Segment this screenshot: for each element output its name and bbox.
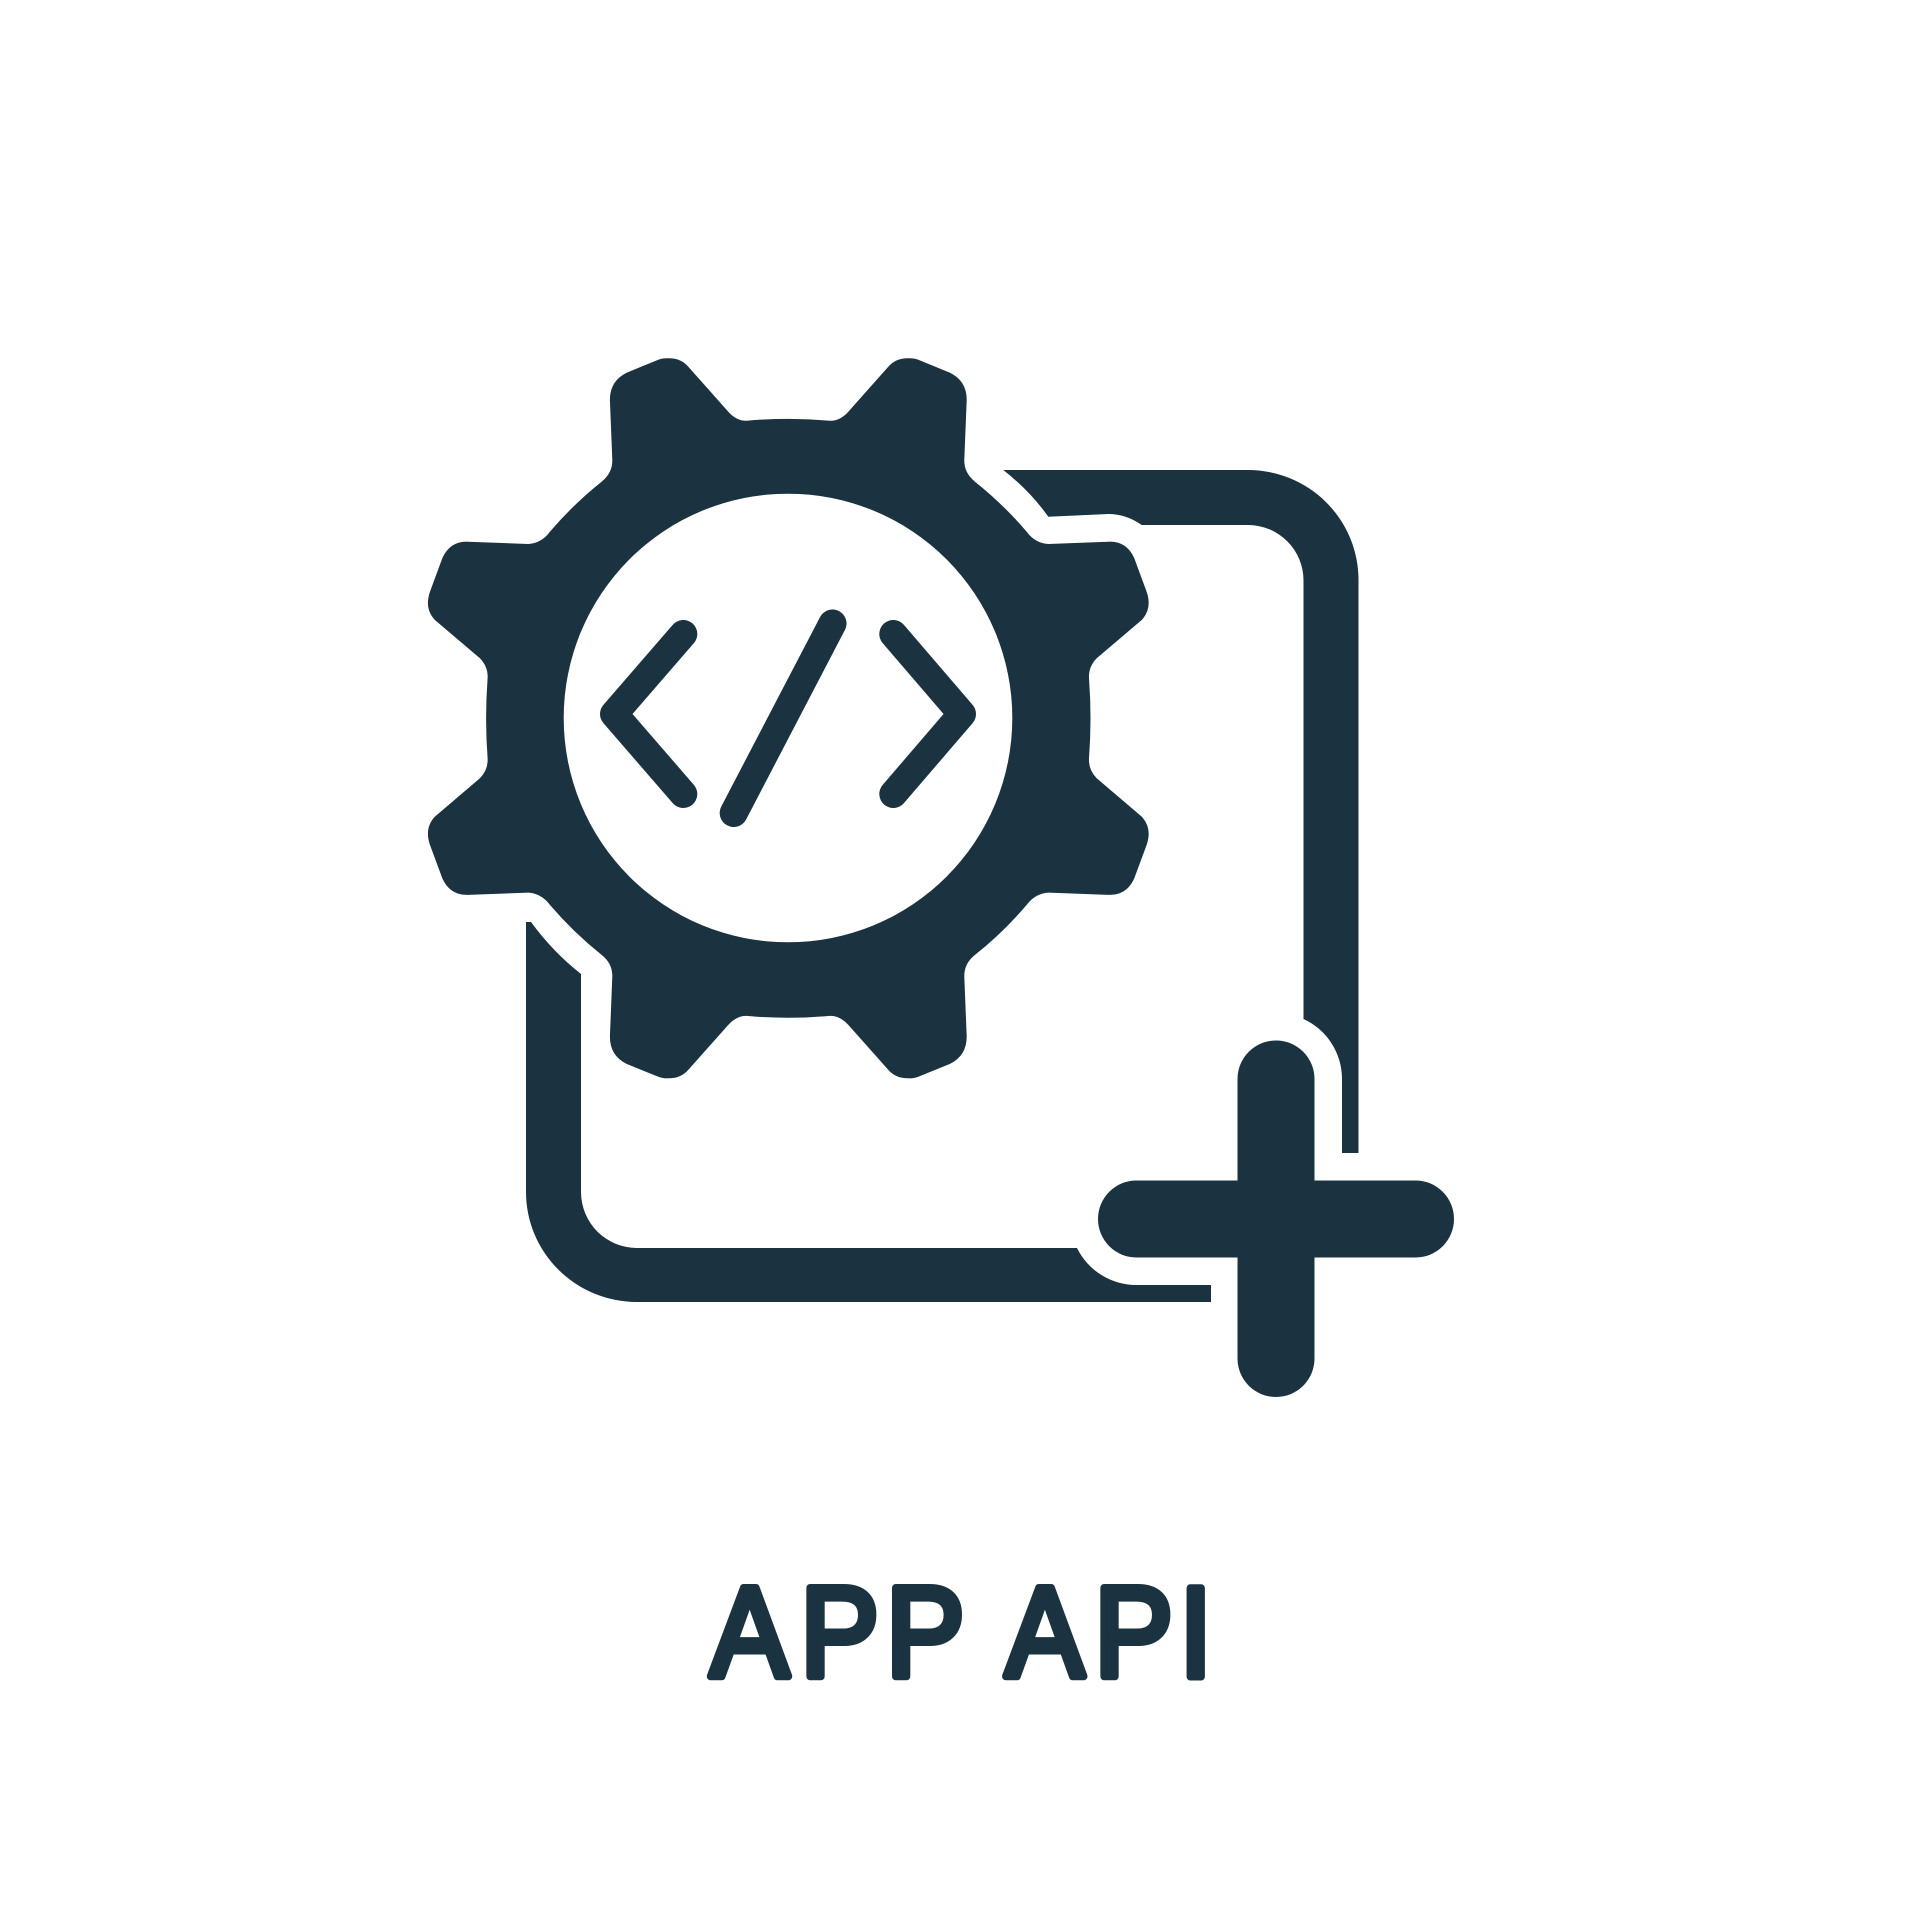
icon: app window frame, bottom left part — [526, 922, 1211, 1302]
icon: gear with code symbol — [428, 358, 1149, 1078]
title: APP API: P — [886, 1562, 965, 1705]
icon: plus sign — [1136, 1079, 1416, 1358]
title: APP API: A — [710, 1562, 789, 1705]
gear inner circle — [564, 494, 1012, 942]
title: APP API: A — [1006, 1562, 1084, 1705]
gear body — [428, 358, 1149, 1078]
title: APP API: I — [1179, 1562, 1212, 1705]
title: APP API: P — [800, 1562, 879, 1705]
icon: app window frame, top right part — [1003, 470, 1358, 1153]
code symbol — [614, 624, 962, 813]
title: APP API: P — [1094, 1562, 1173, 1705]
